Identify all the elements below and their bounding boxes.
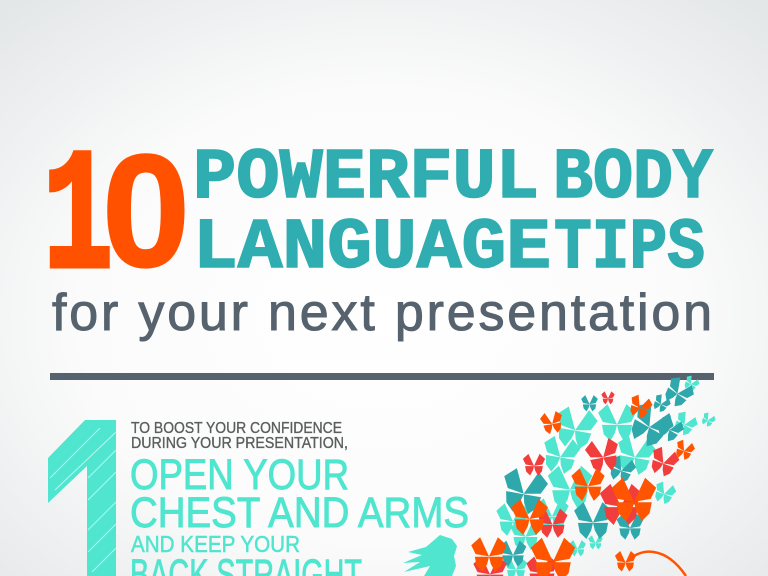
intro line 1: TO BOOST YOUR CONFIDENCE <box>131 420 342 437</box>
title line 2: LANGUAGE <box>193 209 551 289</box>
title line 1: BODY <box>553 139 713 219</box>
title number 10: 0 <box>102 121 190 300</box>
headline line 1: OPEN YOUR <box>130 451 349 499</box>
headline line 2: CHEST AND ARMS <box>130 489 469 537</box>
title <box>43 121 713 318</box>
divider rule <box>50 373 714 380</box>
title number 10 <box>43 121 190 318</box>
icon: figure head with flowing hair <box>403 535 457 576</box>
title line 1 <box>193 139 713 219</box>
title number 10: 1 <box>43 123 113 318</box>
subhead line 1: AND KEEP YOUR <box>131 531 300 557</box>
icon: swirl of butterflies <box>471 373 717 576</box>
intro line 2: DURING YOUR PRESENTATION, <box>131 435 348 452</box>
swirl line <box>628 552 686 576</box>
title line 1: POWERFUL <box>193 139 539 219</box>
tip number 1 <box>48 420 116 576</box>
title line 2: TIPS <box>554 209 705 289</box>
title line 2 <box>193 209 705 289</box>
subtitle: for your next presentation <box>52 284 712 342</box>
tip 1 text <box>130 420 469 576</box>
